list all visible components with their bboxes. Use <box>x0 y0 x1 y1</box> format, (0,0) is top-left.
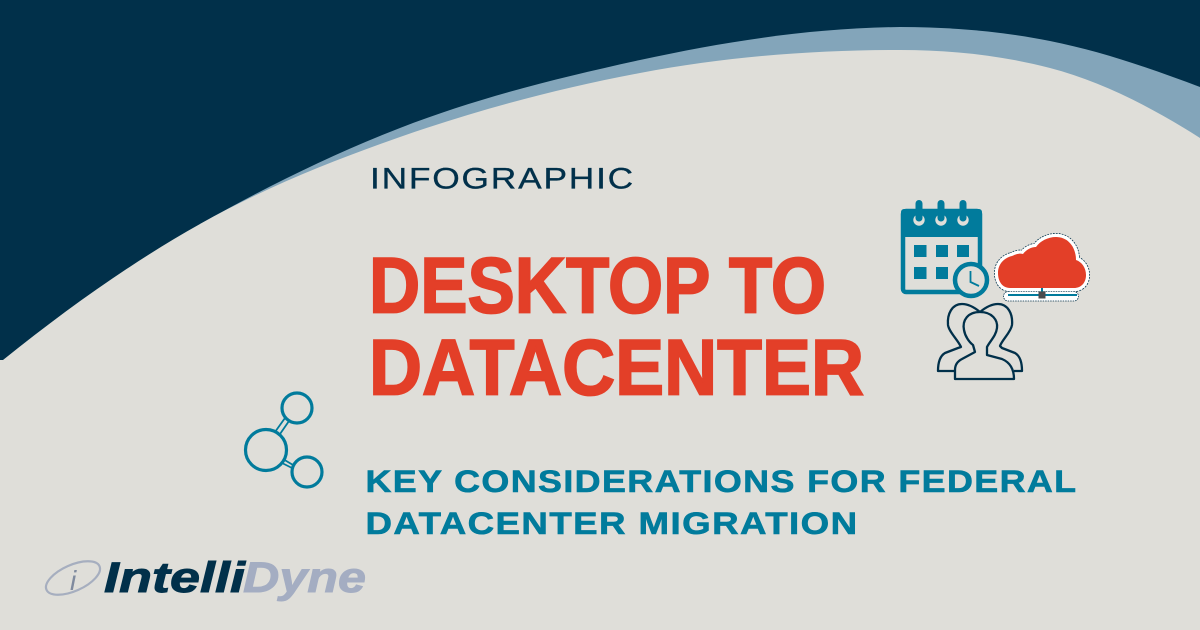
icon: cloud with network <box>998 237 1086 301</box>
icon: group of people <box>938 304 1022 379</box>
logo: IntelliDyne <box>41 554 366 602</box>
icon: calendar with clock <box>901 204 987 296</box>
subtitle <box>366 463 1078 541</box>
logo mark: i <box>70 565 77 596</box>
title line 1: DESKTOP TO <box>369 240 826 330</box>
light blue swoosh <box>200 27 1200 400</box>
title <box>369 240 864 412</box>
logo wordmark: Intelli: Intelli <box>104 554 246 602</box>
logo wordmark: Dyne: Dyne <box>243 554 366 602</box>
dark navy header shape <box>0 0 1200 400</box>
icon: molecule network <box>246 393 322 487</box>
label: infographic: INFOGRAPHIC <box>370 162 635 196</box>
title line 2: DATACENTER <box>369 322 864 412</box>
subtitle line 2: DATACENTER MIGRATION <box>366 505 858 541</box>
logo mark <box>41 554 105 602</box>
subtitle line 1: KEY CONSIDERATIONS FOR FEDERAL <box>366 463 1078 499</box>
